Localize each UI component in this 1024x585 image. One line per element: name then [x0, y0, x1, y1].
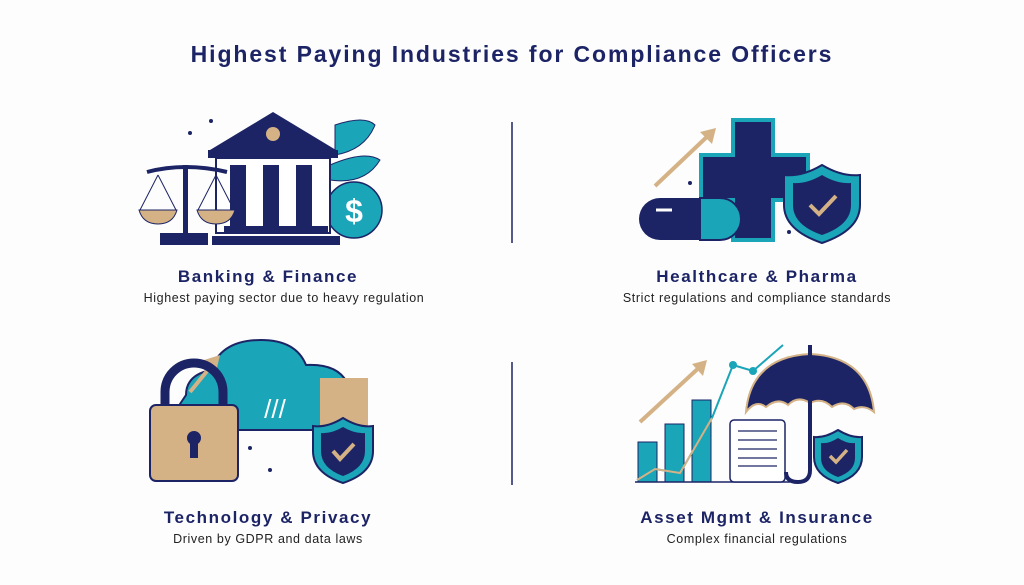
icon: asset management	[635, 345, 874, 483]
title: Highest Paying Industries for Compliance Officers	[191, 41, 833, 67]
icon: healthcare	[639, 120, 860, 243]
text: asset: Complex financial regulations	[667, 532, 847, 546]
heading: asset: Asset Mgmt & Insurance	[640, 508, 874, 527]
heading: banking: Banking & Finance	[178, 267, 358, 286]
icon: technology	[150, 340, 373, 483]
text: banking: Highest paying sector due to heavy regulation	[144, 291, 424, 305]
text: technology: Driven by GDPR and data laws	[173, 532, 363, 546]
icon: technology: ///	[264, 394, 287, 424]
icon: banking	[139, 112, 382, 245]
text: healthcare: Strict regulations and compliance standards	[623, 291, 891, 305]
icon: banking: $	[345, 193, 363, 229]
heading: technology: Technology & Privacy	[164, 508, 372, 527]
heading: healthcare: Healthcare & Pharma	[656, 267, 858, 286]
